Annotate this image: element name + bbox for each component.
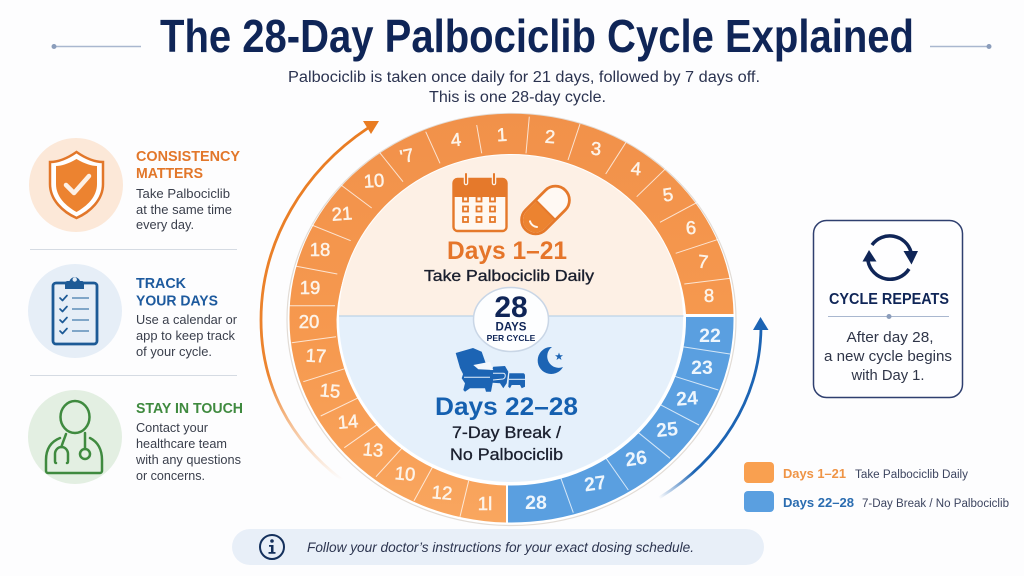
ring day numbers: 23 xyxy=(691,357,713,379)
ring day numbers: 4 xyxy=(450,129,462,150)
text: stay in touch body: Contact your xyxy=(136,421,208,435)
panel: days 22-28 quadrant xyxy=(339,315,684,482)
panel: days 1-21 quadrant xyxy=(339,154,683,316)
text: follow instructions: Follow your doctor’s instructions for your exact dosing schedule. xyxy=(307,540,694,555)
text: cycle repeats body: a new cycle begins xyxy=(824,348,952,365)
ring day numbers: 24 xyxy=(675,387,699,411)
center badge: 28 days per cycle: PER CYCLE xyxy=(487,333,536,343)
heading: consistency matters xyxy=(136,149,240,182)
legend item: days 22-28 xyxy=(744,491,1009,512)
icon: capsule xyxy=(516,180,575,240)
legend item: days 1-21: Days 1–21 xyxy=(783,467,846,481)
ring day numbers: 10 xyxy=(394,462,416,485)
icon: cycle arrows xyxy=(862,236,918,279)
heading: consistency matters: CONSISTENCY xyxy=(136,149,240,165)
panel: left tips xyxy=(28,138,243,484)
tip: consistency matters xyxy=(29,138,240,232)
heading: track your days xyxy=(136,276,218,310)
ring day numbers xyxy=(299,124,721,514)
text: track body: app to keep track xyxy=(136,329,236,343)
icon: shield with check xyxy=(29,138,123,232)
ring day numbers: 4 xyxy=(630,158,642,179)
chart: 28-day cycle wheel xyxy=(287,114,736,526)
heading: consistency matters: MATTERS xyxy=(136,166,203,182)
heading: track your days: TRACK xyxy=(136,276,187,292)
heading: days 22-28: Days 22–28 xyxy=(435,393,578,421)
ring day numbers: 1 xyxy=(496,124,508,145)
ring day numbers: 20 xyxy=(299,311,319,332)
text: track body xyxy=(136,313,237,359)
legend item: days 22-28: 7-Day Break / No Palbociclib xyxy=(862,498,1009,510)
ring day numbers: 17 xyxy=(305,344,327,367)
ring day numbers: 5 xyxy=(661,183,674,206)
heading: stay in touch: STAY IN TOUCH xyxy=(136,401,243,417)
text: consistency body xyxy=(136,187,232,232)
text: stay in touch body: or concerns. xyxy=(136,469,205,483)
legend item: days 22-28: Days 22–28 xyxy=(783,496,854,510)
panel: cycle repeats card xyxy=(814,220,962,398)
ring day numbers: 25 xyxy=(655,418,679,442)
callout: doctor's instructions xyxy=(232,529,764,565)
text: stay in touch body: healthcare team xyxy=(136,437,227,451)
subtitle: This is one 28-day cycle. xyxy=(429,89,606,106)
text: cycle repeats body xyxy=(824,329,952,384)
center badge: 28 days per cycle: DAYS xyxy=(496,322,527,334)
legend item: days 1-21: Take Palbociclib Daily xyxy=(855,469,968,481)
ring day numbers: 18 xyxy=(310,239,330,260)
legend xyxy=(744,462,1009,512)
text: 7-day break xyxy=(450,424,563,464)
center badge: 28 days per cycle: 28 xyxy=(494,291,528,324)
ring day numbers: 2 xyxy=(544,126,556,147)
icon: moon and star xyxy=(538,347,563,374)
arrow: orange clockwise arc xyxy=(261,121,379,480)
text: consistency body: Take Palbociclib xyxy=(136,187,230,201)
icon: info xyxy=(260,535,284,559)
ring day numbers: 21 xyxy=(331,202,353,225)
heading: days 1-21: Days 1–21 xyxy=(447,237,567,265)
icon: armchair and ottoman xyxy=(456,348,525,392)
ring day numbers: 6 xyxy=(685,217,697,238)
text: consistency body: at the same time xyxy=(136,203,232,217)
ring day numbers: 3 xyxy=(590,138,602,159)
tip: track your days xyxy=(28,264,237,359)
ring day numbers: 19 xyxy=(300,277,320,298)
ring day numbers: '7 xyxy=(398,144,416,167)
ring day numbers: 15 xyxy=(319,379,341,402)
ring day numbers: 28 xyxy=(525,492,547,514)
icon: calendar xyxy=(454,174,506,231)
title ornament: right line xyxy=(930,44,992,49)
text: track body: of your cycle. xyxy=(136,345,212,359)
ring day numbers: 7 xyxy=(697,251,709,272)
heading: cycle repeats: CYCLE REPEATS xyxy=(829,291,949,308)
subtitle xyxy=(288,69,760,106)
ring day numbers: 12 xyxy=(431,481,453,504)
ring day numbers: 22 xyxy=(699,325,721,347)
ring day numbers: 1l xyxy=(478,493,492,514)
tip: stay in touch xyxy=(28,390,243,484)
ring day numbers: 26 xyxy=(624,447,649,471)
heading: track your days: YOUR DAYS xyxy=(136,294,218,310)
text: consistency body: every day. xyxy=(136,218,194,232)
icon: doctor with stethoscope xyxy=(28,390,122,484)
ring day numbers: 8 xyxy=(704,285,714,306)
text: cycle repeats body: After day 28, xyxy=(846,329,934,346)
text: cycle repeats body: with Day 1. xyxy=(851,367,924,384)
text: stay in touch body xyxy=(135,421,241,483)
ring: orange days 1-21 xyxy=(289,114,734,523)
ring: blue days 22-28 xyxy=(508,317,734,523)
subtitle: Palbociclib is taken once daily for 21 days, followed by 7 days off. xyxy=(288,69,760,86)
legend item: days 1-21 xyxy=(744,462,968,483)
text: 7-day break: No Palbociclib xyxy=(450,446,563,464)
title: The 28-Day Palbociclib Cycle Explained xyxy=(160,10,914,62)
text: 7-day break: 7-Day Break / xyxy=(452,424,561,442)
arrow: blue clockwise arc xyxy=(659,317,768,498)
title ornament: left line xyxy=(52,44,141,49)
text: stay in touch body: with any questions xyxy=(135,453,241,467)
text: track body: Use a calendar or xyxy=(136,313,237,327)
ring day numbers: 27 xyxy=(583,472,607,496)
ring day numbers: 13 xyxy=(362,438,384,461)
ring day numbers: 14 xyxy=(337,410,359,433)
text: take palbociclib daily: Take Palbociclib Daily xyxy=(424,268,594,285)
icon: clipboard checklist xyxy=(28,264,122,358)
center badge: 28 days per cycle xyxy=(474,288,548,352)
ring day numbers: 10 xyxy=(363,169,385,192)
